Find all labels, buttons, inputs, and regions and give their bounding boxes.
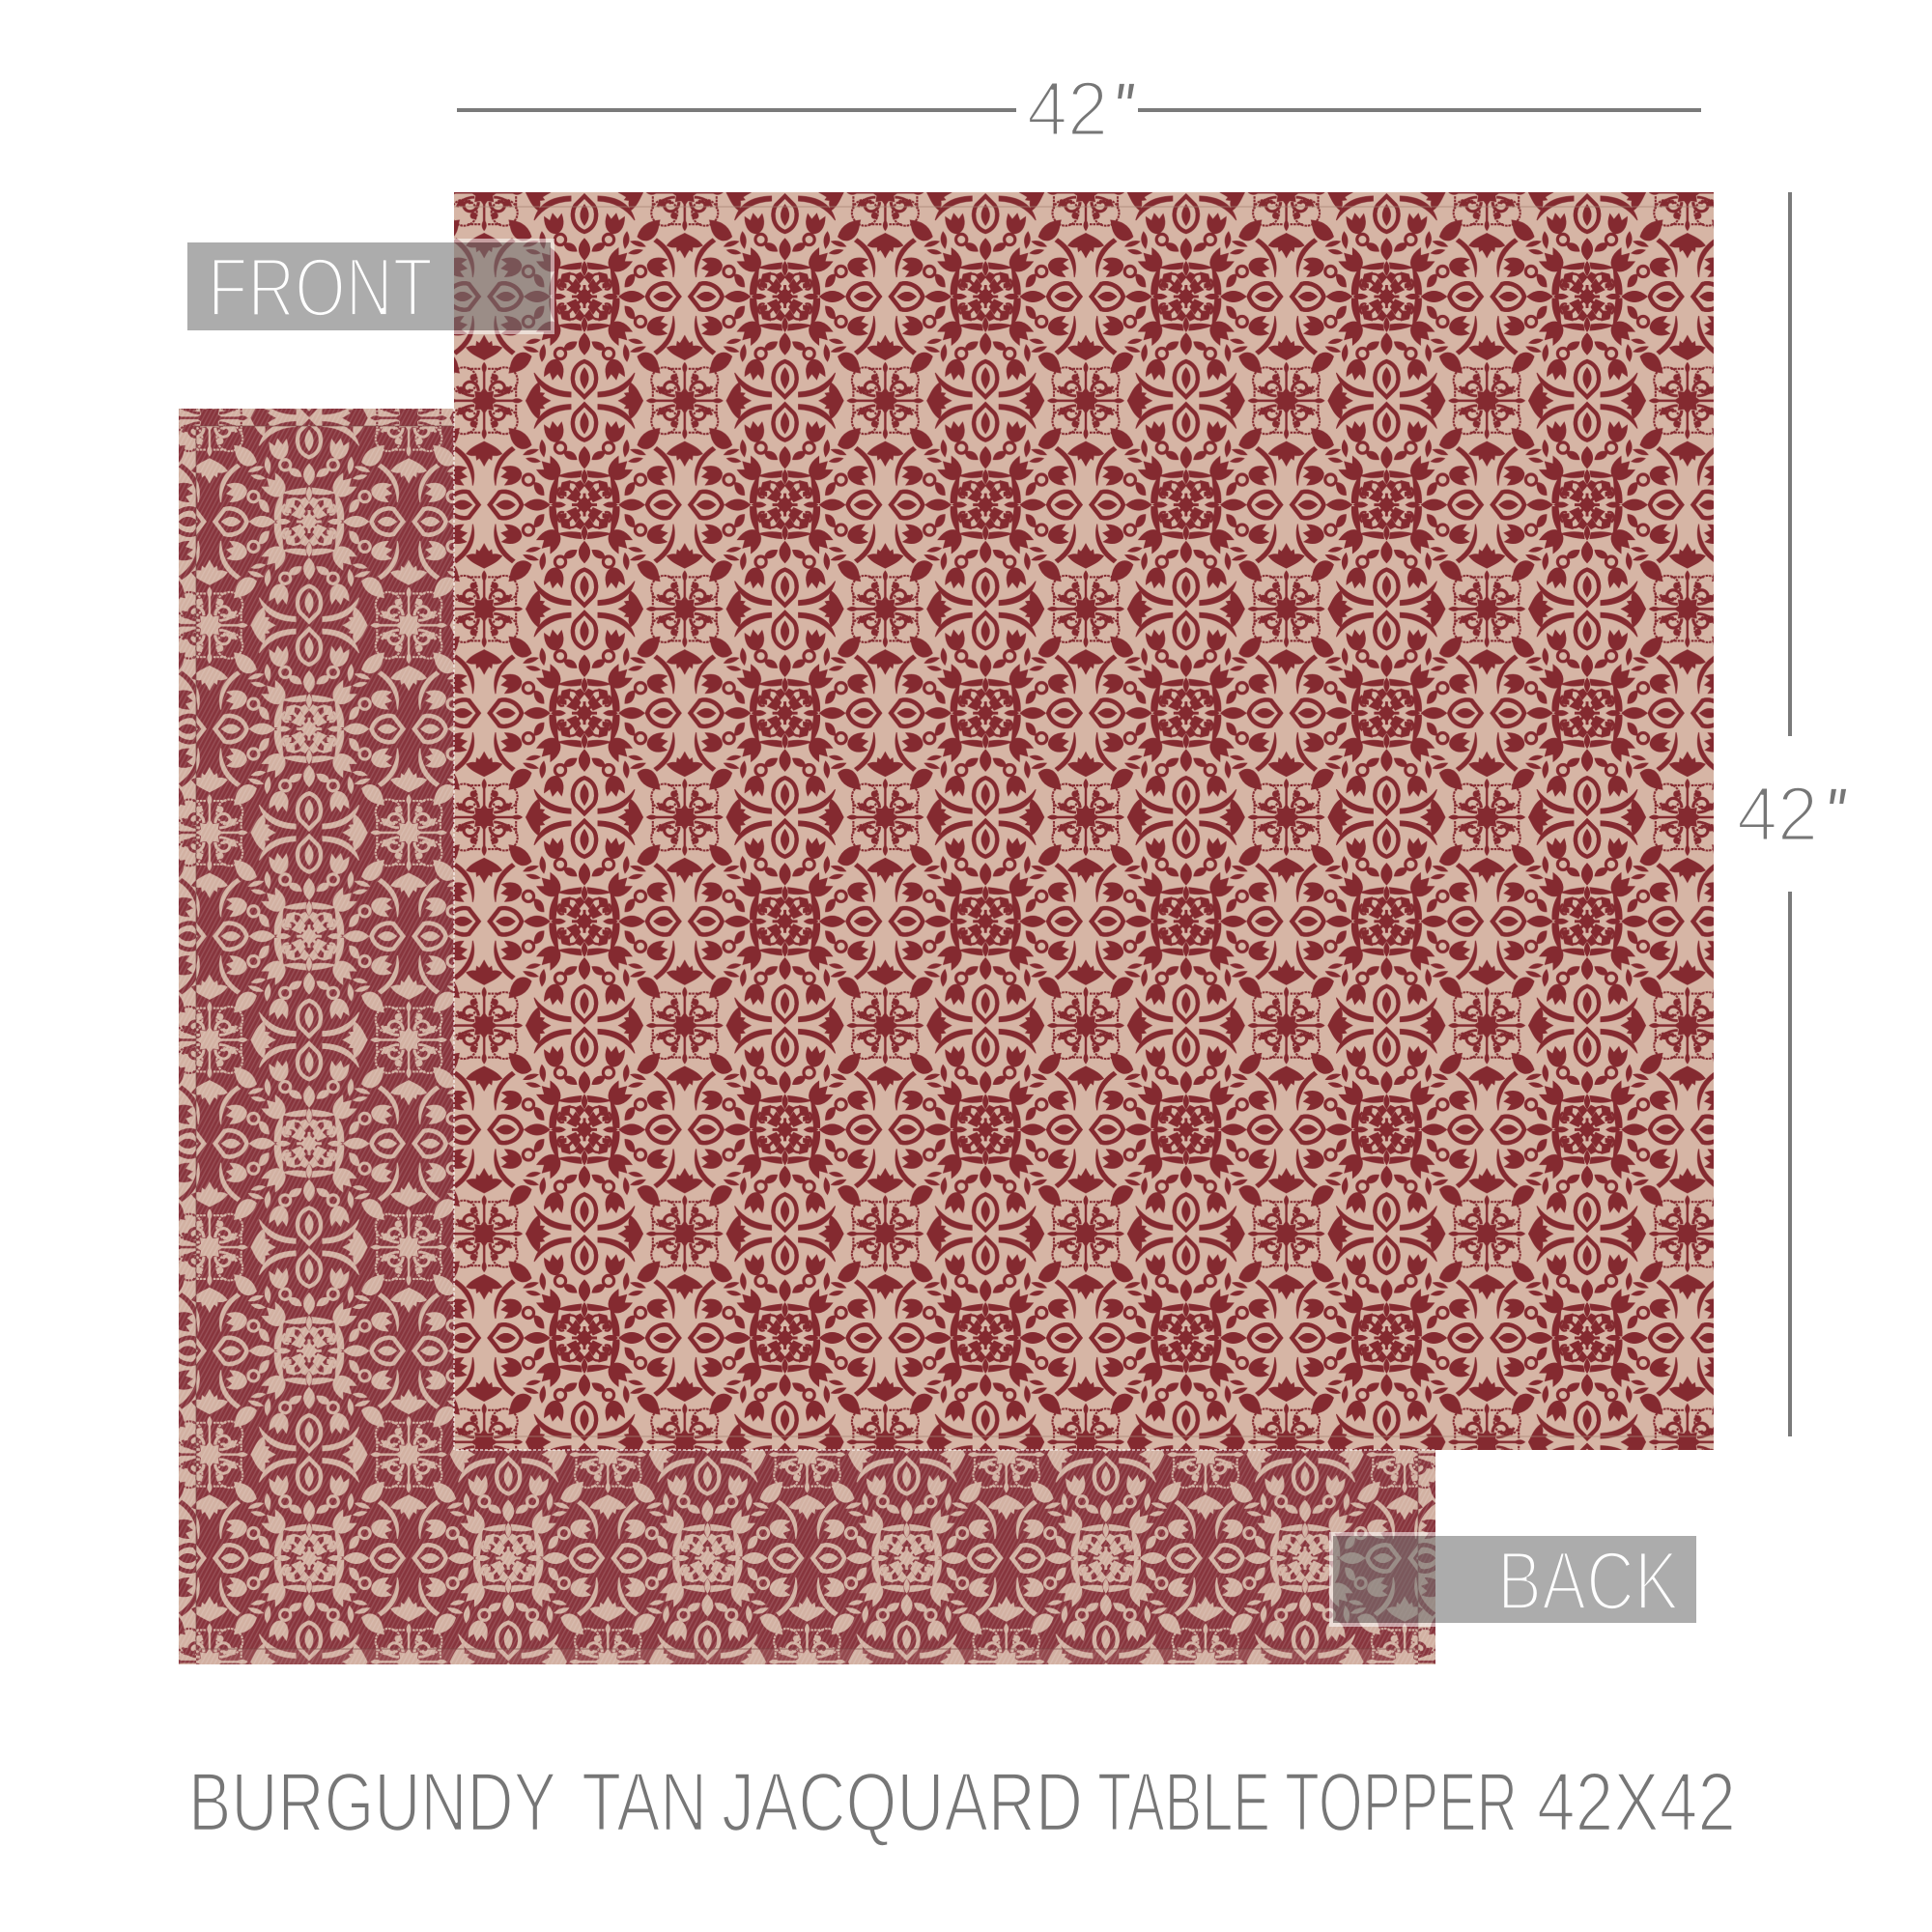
title: BURGUNDY: [188, 1756, 556, 1849]
title: [188, 1756, 1736, 1849]
height dimension: 42 inches: ": [1825, 775, 1847, 850]
width dimension: 42 inches: ": [1113, 70, 1135, 145]
panel: front of table topper: [454, 192, 1714, 1450]
title: 42X42: [1537, 1756, 1736, 1849]
label: back: [1331, 1534, 1698, 1628]
title: TOPPER: [1285, 1756, 1518, 1849]
label: back: BACK: [1497, 1535, 1679, 1628]
height dimension: 42 inches: [1737, 192, 1847, 1436]
height dimension: 42 inches: 42: [1737, 771, 1818, 857]
width dimension: 42 inches: 42: [1027, 66, 1108, 152]
title: TAN: [582, 1756, 707, 1849]
width dimension: 42 inches: [457, 66, 1701, 152]
label: front: FRONT: [208, 242, 433, 334]
title: JACQUARD: [722, 1756, 1083, 1849]
panel: back of table topper: [179, 409, 1435, 1664]
title: TABLE: [1097, 1756, 1270, 1849]
